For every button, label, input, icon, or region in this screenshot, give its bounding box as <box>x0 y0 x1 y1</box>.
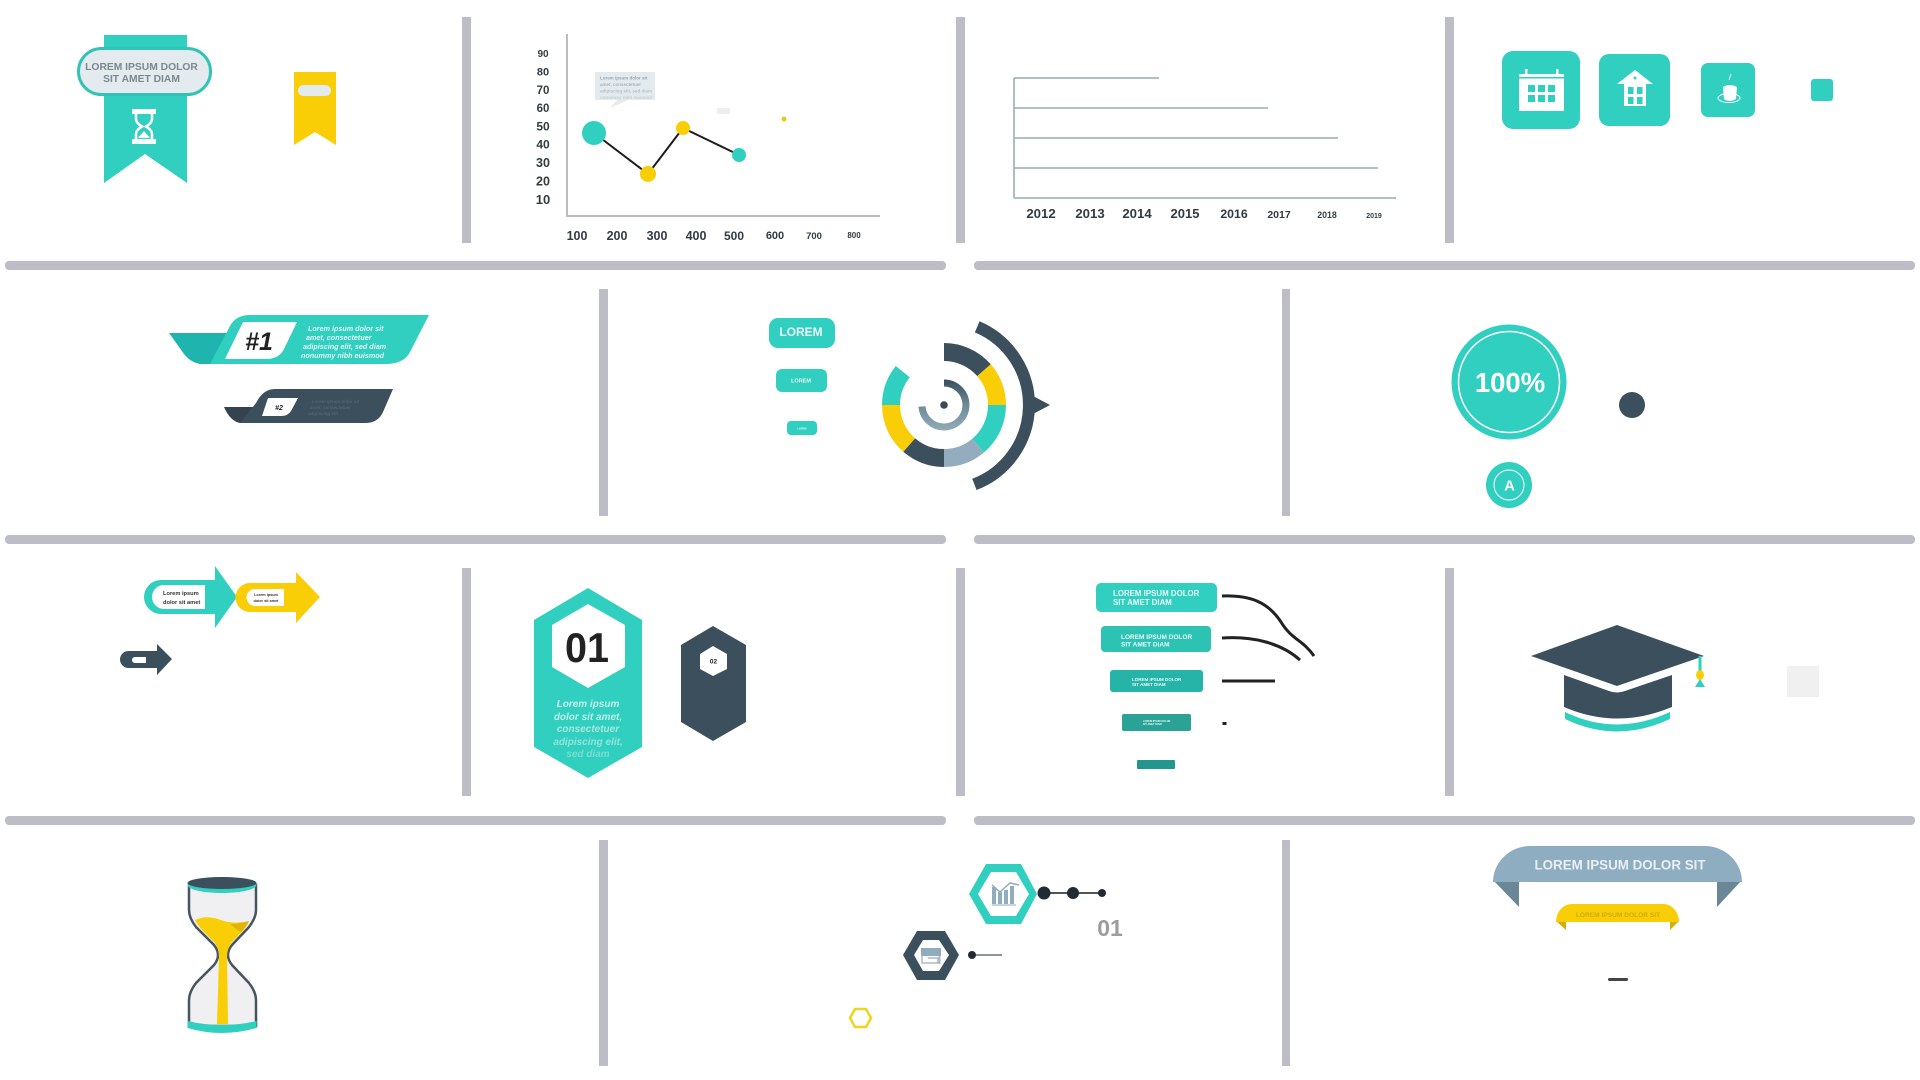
banner #2: Lorem ipsum dolor sit <box>312 399 360 404</box>
panel: radial chart <box>769 318 1050 484</box>
panel: scatter line chart <box>536 34 880 243</box>
label 5 <box>1137 760 1175 769</box>
x axis labels: 100 <box>567 229 587 243</box>
icon: large hourglass <box>188 877 256 1033</box>
teal arrow <box>144 566 237 628</box>
icon: yellow hexagon <box>850 1009 871 1027</box>
line connector <box>968 951 1002 959</box>
y axis labels: 40 <box>536 138 550 152</box>
yellow ribbon: LOREM IPSUM DOLOR SIT <box>1576 912 1660 919</box>
banner #1: Lorem ipsum dolor sit <box>308 324 384 333</box>
banner #1: nonummy nibh euismod <box>301 351 385 360</box>
button: medium <box>776 369 827 392</box>
button: small: LOREM <box>797 428 807 430</box>
blue ribbon: LOREM IPSUM DOLOR SIT <box>1534 858 1706 872</box>
circle: A <box>1486 462 1532 508</box>
dark arrow <box>120 644 172 675</box>
circle: 100%: 100% <box>1475 367 1545 398</box>
panel: numbered hexagons <box>534 588 746 778</box>
y axis labels: 90 <box>537 49 549 60</box>
x axis labels: 600 <box>766 230 784 242</box>
icon: graduation cap <box>1531 625 1705 732</box>
button: large: LOREM <box>779 325 823 339</box>
data line <box>594 128 739 174</box>
label 4: SIT AMET DIAM <box>1143 723 1162 726</box>
yellow arrow <box>236 572 320 623</box>
teal ribbon badge <box>78 35 210 183</box>
year labels: 2019 <box>1366 213 1382 220</box>
teal arrow: dolor sit amet <box>163 600 200 606</box>
panel: percent circles <box>1452 324 1645 508</box>
small yellow dot <box>782 116 786 122</box>
year labels: 2014 <box>1122 206 1152 221</box>
yellow ribbon <box>1556 904 1679 930</box>
hexagon 01: sed diam <box>566 749 610 760</box>
year labels: 2017 <box>1267 209 1291 221</box>
panel: arrows <box>120 566 320 675</box>
icon tile: small <box>1811 79 1833 101</box>
banner #2 <box>224 389 393 423</box>
icon: hourglass <box>132 109 156 144</box>
chart lines <box>1014 78 1396 198</box>
connector curves <box>1222 596 1314 681</box>
label 3: LOREM IPSUM DOLOR <box>1132 677 1182 682</box>
label 1: SIT AMET DIAM <box>1113 598 1172 607</box>
icon: calendar <box>1502 51 1580 129</box>
banner #2: amet, consectetuer <box>310 405 351 410</box>
hexagon 01: Lorem ipsum <box>557 699 619 710</box>
panel: title ribbons <box>1493 846 1742 981</box>
banner #1: #1 <box>245 328 273 356</box>
label 3: SIT AMET DIAM <box>1132 682 1166 687</box>
faded square <box>1787 666 1819 697</box>
label 1 <box>1096 583 1217 612</box>
yellow arrow: Lorem ipsum <box>254 593 279 597</box>
banner #1: adipiscing elit, sed diam <box>303 342 387 351</box>
y axis labels: 80 <box>537 66 549 78</box>
callout: amet, consectetuer <box>600 82 641 87</box>
circle: 100% <box>1452 324 1566 440</box>
hexagon 01: 01 <box>565 624 609 671</box>
panel: ribbon badges <box>78 35 336 183</box>
icon: chart hexagon <box>969 864 1037 924</box>
x axis labels: 700 <box>806 231 822 242</box>
x axis labels: 300 <box>647 229 667 243</box>
outer arc with pointer <box>974 327 1050 484</box>
y axis labels: 20 <box>536 174 550 188</box>
y axis labels: 10 <box>536 192 550 207</box>
year labels: 2016 <box>1220 207 1248 221</box>
panel: ranked banners <box>169 315 429 423</box>
icon: house <box>1599 54 1670 126</box>
panel: stacked labels with curves <box>1096 583 1314 769</box>
y axis labels: 50 <box>536 120 550 134</box>
x axis labels <box>567 229 861 243</box>
small dash <box>1608 978 1628 981</box>
hexagon 01: consectetuer <box>557 724 620 735</box>
x axis labels: 200 <box>607 229 627 243</box>
chart axes <box>567 34 880 216</box>
inner progress arc <box>922 383 966 427</box>
button: medium: LOREM <box>791 378 811 384</box>
year labels: 2015 <box>1171 206 1199 221</box>
hexagon 01: dolor sit amet, <box>554 712 622 723</box>
callout <box>595 72 655 108</box>
callout: adipiscing elit, sed diam <box>600 88 652 94</box>
panel: hourglass <box>188 877 256 1033</box>
y axis labels: 30 <box>536 156 550 170</box>
radial ring chart <box>891 352 997 458</box>
icon: store hexagon <box>903 931 959 980</box>
hexagon 01 <box>534 588 642 778</box>
x axis labels: 800 <box>847 231 861 240</box>
label 2 <box>1101 626 1211 652</box>
dot connector <box>1038 886 1106 900</box>
year labels: 2012 <box>1026 206 1056 221</box>
banner #1: amet, consectetuer <box>306 333 373 342</box>
label 2: SIT AMET DIAM <box>1121 642 1170 648</box>
panel: icon tiles <box>1502 51 1833 129</box>
y axis labels <box>536 49 550 207</box>
x axis labels: 400 <box>686 229 706 243</box>
callout: Lorem ipsum dolor sit <box>600 76 648 80</box>
year labels: 2013 <box>1075 206 1105 221</box>
y axis labels: 70 <box>537 85 549 97</box>
callout: nonummy nibh euismod <box>600 95 652 100</box>
y axis labels: 60 <box>537 103 549 115</box>
year labels <box>1026 206 1382 221</box>
hexagon 02 <box>681 626 746 741</box>
banner #1 <box>169 315 429 364</box>
connector dot <box>1222 722 1226 725</box>
panel: year line chart <box>1014 78 1396 221</box>
circle: A: A <box>1504 478 1515 494</box>
label 3 <box>1110 670 1203 692</box>
data points <box>582 121 746 182</box>
faded marker <box>717 108 730 114</box>
label 4: LOREM IPSUM DOLOR <box>1143 720 1171 723</box>
yellow ribbon <box>294 72 336 145</box>
hexagon 01: adipiscing elit, <box>553 737 623 748</box>
label 2: LOREM IPSUM DOLOR <box>1121 634 1192 641</box>
icon: coffee cup <box>1701 63 1755 117</box>
button: small <box>787 421 817 435</box>
hexagon 02: 02 <box>710 658 717 666</box>
blue ribbon <box>1493 846 1742 907</box>
year labels: 2018 <box>1317 210 1337 220</box>
center dot <box>940 401 948 409</box>
teal arrow: Lorem ipsum <box>163 591 199 597</box>
teal ribbon badge: SIT AMET DIAM <box>103 74 180 85</box>
dark dot <box>1619 392 1645 418</box>
teal ribbon badge: LOREM IPSUM DOLOR <box>85 62 198 73</box>
yellow arrow: dolor sit amet <box>254 599 279 603</box>
panel: hexagon icons <box>850 864 1123 1027</box>
panel: graduation cap <box>1531 625 1819 732</box>
banner #2: adipiscing elit <box>308 411 339 416</box>
label 1: LOREM IPSUM DOLOR <box>1113 589 1200 598</box>
banner #2: #2 <box>275 405 283 412</box>
label 4 <box>1122 714 1191 731</box>
x axis labels: 500 <box>724 229 744 243</box>
button: large <box>769 318 835 348</box>
number 01: 01 <box>1097 915 1123 941</box>
